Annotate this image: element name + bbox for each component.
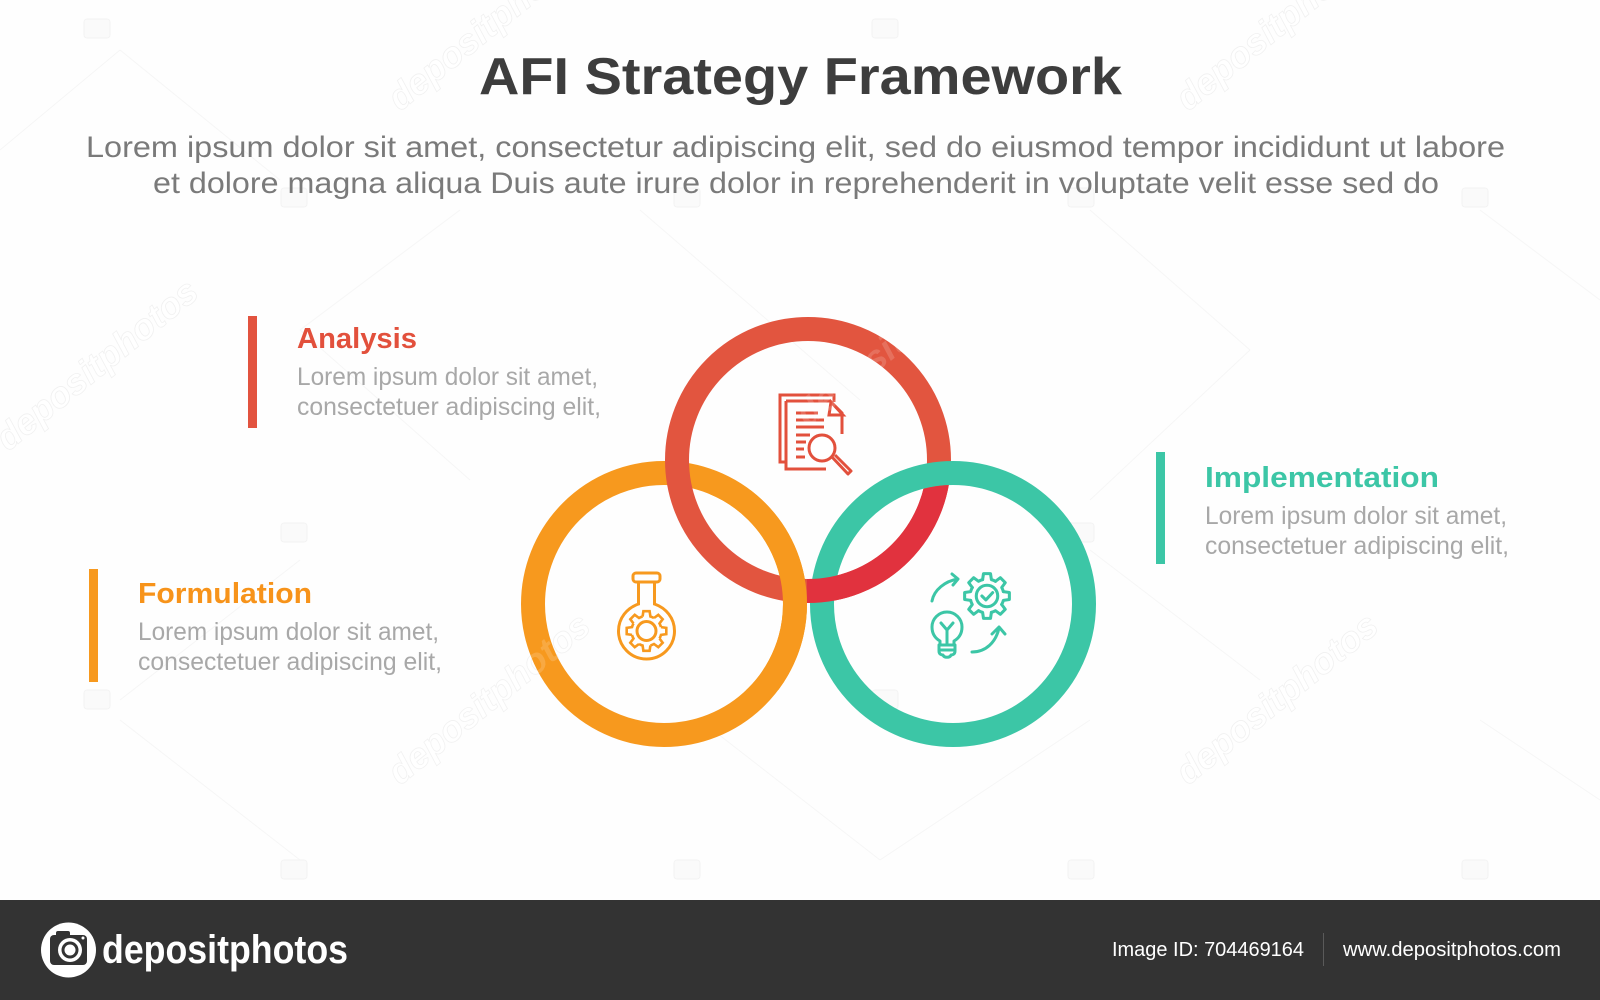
panel: Formulation: Formulation: [138, 578, 312, 610]
watermark pattern: depositphotos: [1167, 604, 1386, 792]
image id: Image ID: 704469164: [1112, 939, 1304, 961]
watermark overlay on rings: depositphotos: [787, 246, 1006, 434]
panel: Formulation: consectetuer adipiscing elit,: [138, 648, 442, 676]
subtitle: et dolore magna aliqua Duis aute irure dolor in reprehenderit in voluptate velit esse sed do: [153, 167, 1439, 200]
panel: Formulation: Lorem ipsum dolor sit amet,: [138, 618, 439, 646]
panel: Implementation: Implementation: [1205, 462, 1439, 494]
panel: Implementation: consectetuer adipiscing elit,: [1205, 532, 1509, 560]
ring: Formulation: [533, 473, 795, 735]
icon: document with magnifier: [780, 395, 851, 474]
panel: Analysis: consectetuer adipiscing elit,: [297, 393, 601, 421]
panel: Implementation: [1156, 452, 1509, 564]
footer bar: [0, 900, 1600, 1000]
watermark pattern: depositphotos: [379, 604, 598, 792]
ring: Implementation: [822, 473, 1084, 735]
watermark overlay on rings: [379, 246, 1006, 792]
ring: Analysis: [677, 329, 939, 591]
subtitle: Lorem ipsum dolor sit amet, consectetur adipiscing elit, sed do eiusmod tempor incididunt ut labore: [86, 131, 1505, 164]
watermark overlay on rings: depositphotos: [379, 604, 598, 792]
panel: Implementation: Lorem ipsum dolor sit amet,: [1205, 502, 1507, 530]
interlocking rings diagram: [533, 329, 1084, 735]
logo wordmark: depositphotos: [102, 928, 348, 972]
panel: Analysis: Lorem ipsum dolor sit amet,: [297, 363, 598, 391]
logo: depositphotos camera: [41, 922, 96, 978]
subtitle: [86, 131, 1505, 200]
icon: bulb, gear and arrows: [932, 574, 1009, 657]
ring overlap: dark red section: [807, 485, 949, 603]
ring overlap: orange over red: [710, 490, 807, 690]
website: www.depositphotos.com: [1342, 939, 1561, 961]
panel: Analysis: [248, 316, 601, 428]
title: AFI Strategy Framework: [479, 48, 1122, 106]
panel: Formulation: [89, 569, 442, 682]
icon: flask with gear: [618, 573, 674, 659]
panel: Analysis: Analysis: [297, 323, 417, 355]
